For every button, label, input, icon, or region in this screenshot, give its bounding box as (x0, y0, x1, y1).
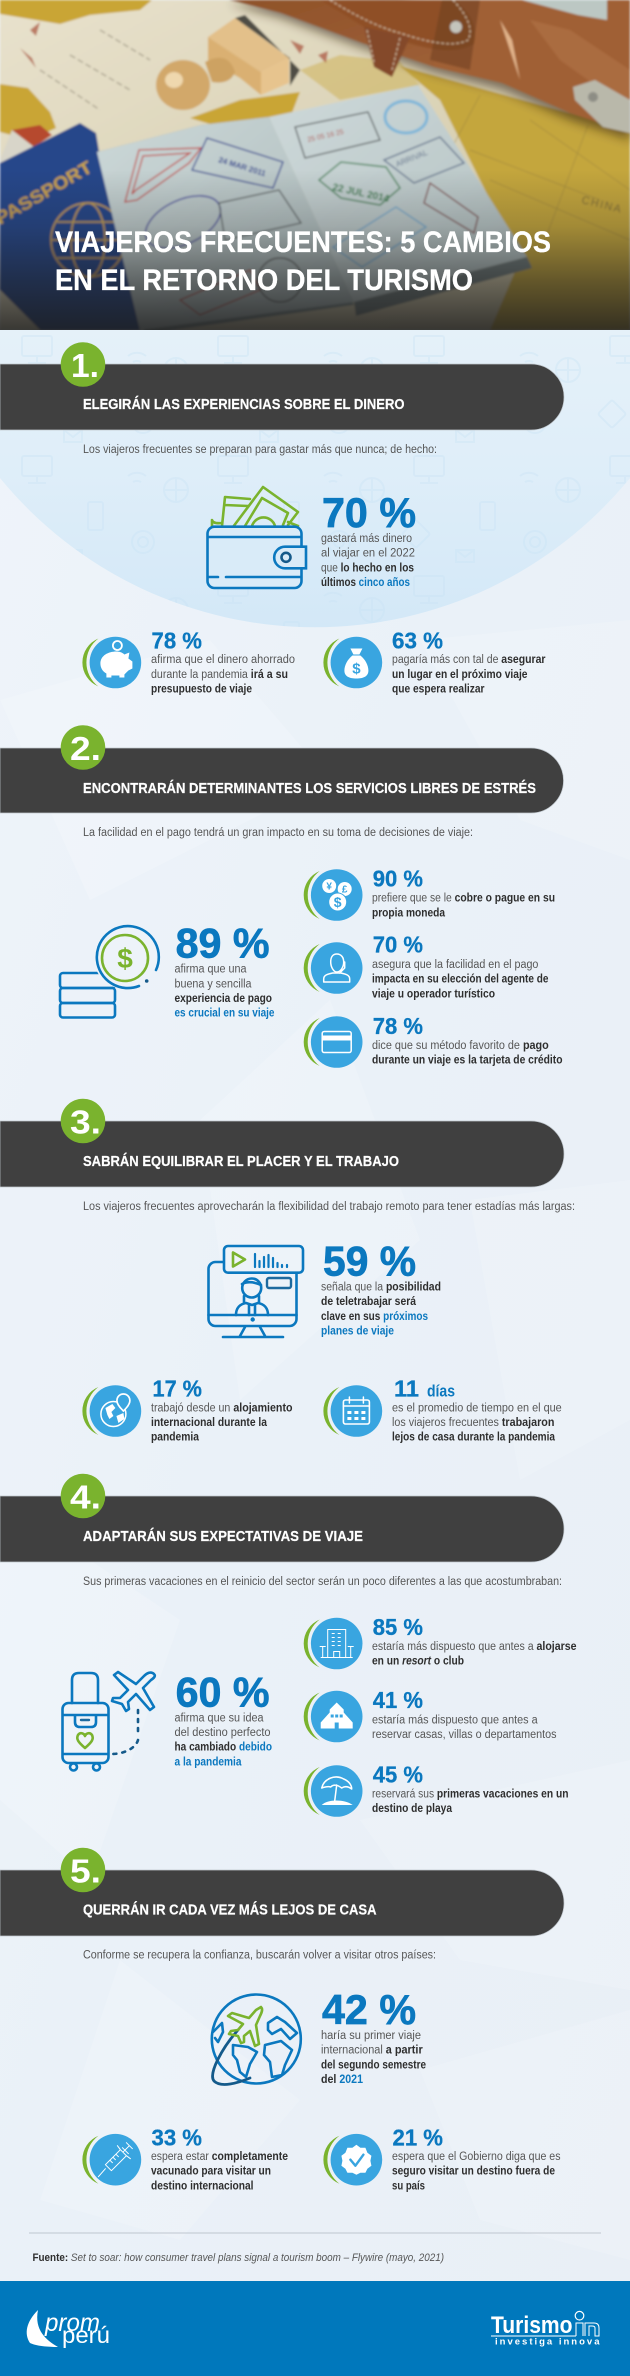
stat: 70 %: 70 % (322, 489, 416, 536)
section 2 intro: La facilidad en el pago tendrá un gran impacto en su toma de decisiones de viaje: (83, 827, 473, 839)
stat: 90 %: prefiere que se le cobre o pague en su (372, 893, 555, 905)
passport stamps: 22 JUL 2014 (331, 182, 390, 205)
stat: 85 % (372, 1614, 576, 1668)
section 5 heading: QUERRÁN IR CADA VEZ MÁS LEJOS DE CASA (83, 1902, 377, 1918)
stat: 59 %: de teletrabajar será (321, 1296, 417, 1308)
stat: 33 %: 33 % (152, 2124, 202, 2150)
logo: PromPerú: prom (44, 2309, 100, 2337)
stat: 85 %: estaría más dispuesto que antes a alojarse (372, 1641, 576, 1653)
icon: globe with pin (82, 1385, 141, 1437)
stat: 42 %: 42 % (322, 1986, 416, 2033)
stat: 42 %: haría su primer viaje (321, 2030, 421, 2042)
stat: 78 %: afirma que el dinero ahorrado (151, 654, 295, 666)
stat: 78 %: 78 % (152, 628, 202, 654)
icon: calendar (323, 1385, 382, 1437)
icon: coins with dollar (60, 926, 159, 1018)
stat: 21 %: espera que el Gobierno diga que es (392, 2151, 561, 2163)
stat: 11 días (392, 1376, 562, 1444)
stat: 70 % agent: viaje u operador turístico (372, 988, 495, 1000)
stat: 42 % (321, 1986, 426, 2086)
section 3 heading (0, 1099, 564, 1187)
stat: 63 %: un lugar en el próximo viaje (392, 669, 528, 681)
stat: 41 % (372, 1687, 557, 1741)
decorative blue arc panel with icons (0, 330, 630, 630)
passport stamps: 24 MAR 2011 (217, 155, 267, 178)
icon: currencies: $ (334, 894, 342, 910)
passport stamps: 25 05 16 25 (307, 129, 345, 144)
icon: money bag (323, 637, 382, 688)
stat: 85 %: en un resort o club (372, 1656, 464, 1668)
stat: 11 días: es el promedio de tiempo en el que (392, 1402, 562, 1414)
map: yellow land (0, 0, 630, 330)
stat: 60 %: 60 % (176, 1669, 270, 1716)
stat: 59 %: planes de viaje (321, 1326, 394, 1338)
stat: 63 %: que espera realizar (392, 684, 485, 696)
title: EN EL RETORNO DEL TURISMO (55, 264, 473, 297)
suitcase shadow (229, 0, 630, 140)
stat: 89 % (174, 920, 274, 1020)
icon: verified badge (323, 2134, 382, 2186)
stat: 89 %: es crucial en su viaje (174, 1008, 274, 1020)
section 5 heading: 5. (70, 1852, 101, 1890)
stat: 89 %: afirma que una (174, 964, 247, 976)
stat: 78 % card: dice que su método favorito de pago (372, 1040, 549, 1052)
icon: currencies (304, 869, 362, 921)
stat: 11 días: 11 (394, 1376, 419, 1402)
icon: credit card (304, 1016, 362, 1068)
icon: currencies: ¥ (326, 882, 332, 892)
stat: 33 %: destino internacional (151, 2180, 254, 2192)
stat: 63 %: pagaría más con tal de asegurar (392, 654, 546, 666)
section 2 heading: 2. (70, 730, 101, 767)
icon: wallet with bills (208, 487, 306, 588)
map: lines (40, 29, 594, 210)
dark bottom gradient (0, 170, 630, 330)
stat: 63 %: 63 % (392, 628, 443, 654)
footer band (0, 2281, 630, 2376)
open passport (146, 302, 354, 330)
stat: 70 % agent (372, 932, 548, 1000)
title: VIAJEROS FRECUENTES: 5 CAMBIOS (55, 226, 551, 259)
icon: beach umbrella (304, 1765, 362, 1817)
stat: 42 %: internacional a partir (321, 2045, 423, 2057)
source note: Fuente: Set to soar: how consumer travel plans signal a tourism boom – Flywire (mayo, 2021) (32, 2252, 444, 2264)
stat: 89 %: 89 % (176, 920, 270, 966)
stat: 60 %: a la pandemia (174, 1756, 242, 1768)
stat: 33 %: espera estar completamente (151, 2151, 288, 2163)
stat: 59 %: 59 % (323, 1238, 416, 1285)
stat: 17 %: trabajó desde un alojamiento (151, 1402, 292, 1414)
stat: 60 %: afirma que su idea (174, 1712, 264, 1724)
stat: 33 % (151, 2124, 288, 2192)
logo: PromPerú: perú (62, 2322, 110, 2348)
source divider (29, 2232, 601, 2234)
icon: piggy bank (82, 637, 141, 688)
stat: 41 %: reservar casas, villas o departamentos (372, 1729, 557, 1741)
stat: 45 %: 45 % (373, 1761, 423, 1787)
stat: 45 %: destino de playa (372, 1803, 453, 1815)
stat: 59 %: clave en sus próximos (321, 1311, 428, 1323)
stat: 78 % card: 78 % (373, 1013, 423, 1039)
icon: globe with plane (212, 1994, 301, 2084)
stat: 70 % agent: asegura que la facilidad en el pago (372, 959, 538, 971)
stat: 70 % agent: 70 % (373, 932, 423, 958)
stat: 78 % card (372, 1013, 562, 1067)
stat: 70 %: al viajar en el 2022 (321, 548, 415, 560)
icon: currencies: £ (342, 884, 348, 896)
icon: agent with headset (304, 942, 362, 994)
stat: 89 %: experiencia de pago (174, 993, 272, 1005)
stat: 60 %: ha cambiado debido (174, 1742, 272, 1754)
hero photo: passport, stamp, suitcase and map (0, 0, 630, 334)
section 3 intro: Los viajeros frecuentes aprovecharán la flexibilidad del trabajo remoto para tener estadías más largas: (83, 1201, 575, 1213)
stat: 33 %: vacunado para visitar un (151, 2166, 271, 2178)
stat: 70 %: gastará más dinero (321, 533, 412, 545)
stat: 42 %: del 2021 (321, 2074, 364, 2086)
icon: coins with dollar: $ (117, 943, 133, 974)
section 1 heading (0, 342, 564, 430)
icon: money bag: $ (352, 660, 361, 678)
blue passport (0, 123, 141, 330)
icon: hotel resort (304, 1618, 362, 1669)
stat: 21 %: 21 % (392, 2124, 443, 2150)
stat: 78 % card: durante un viaje es la tarjeta de crédito (372, 1055, 562, 1067)
section 1 intro: Los viajeros frecuentes se preparan para gastar más que nunca; de hecho: (83, 444, 437, 456)
stat: 21 %: su país (392, 2180, 425, 2192)
stat: 70 % (321, 489, 416, 589)
map: red accents (20, 22, 328, 68)
stat: 45 % (372, 1761, 568, 1815)
logo: Turismo In: Turismo (491, 2312, 572, 2339)
map label: CHINA (580, 194, 624, 216)
logo: Turismo In: investiga innova (495, 2336, 600, 2347)
stat: 41 %: 41 % (373, 1687, 423, 1713)
stat: 89 %: buena y sencilla (174, 978, 252, 990)
section 3 heading: 3. (70, 1104, 101, 1140)
stat: 70 % agent: impacta en su elección del agente de (372, 974, 548, 986)
stat: 63 % (392, 628, 546, 696)
section 4 heading (0, 1474, 564, 1562)
faint polygon background texture (0, 620, 630, 2260)
passport stamps: ARRIVAL (394, 148, 429, 169)
stat: 78 % (151, 628, 295, 696)
stat: 17 %: pandemia (151, 1432, 200, 1444)
stat: 78 %: durante la pandemia irá a su (151, 669, 288, 681)
suitcase strap (336, 0, 474, 48)
stat: 70 %: últimos cinco años (321, 577, 410, 589)
section 3 heading: SABRÁN EQUILIBRAR EL PLACER Y EL TRABAJO (83, 1153, 399, 1170)
stat: 90 % (372, 866, 555, 919)
stat: 21 %: seguro visitar un destino fuera de (392, 2166, 555, 2178)
stat: 21 % (392, 2124, 561, 2192)
section 4 heading: 4. (70, 1478, 101, 1516)
stat: 59 % (321, 1238, 441, 1338)
stat: 60 %: del destino perfecto (174, 1727, 270, 1739)
stat: 17 % (151, 1376, 292, 1444)
section 5 intro: Conforme se recupera la confianza, buscarán volver a visitar otros países: (83, 1950, 436, 1962)
stat: 78 %: presupuesto de viaje (151, 684, 252, 696)
stat: 41 %: estaría más dispuesto que antes a (372, 1714, 538, 1726)
logo: Turismo In (491, 2311, 600, 2347)
icon: syringe (82, 2134, 141, 2186)
tag (2, 129, 31, 161)
stat: 45 %: reservará sus primeras vacaciones en un (372, 1788, 568, 1800)
stat: 11 días: lejos de casa durante la pandemia (392, 1432, 556, 1444)
stat: 59 %: señala que la posibilidad (321, 1281, 441, 1293)
stat: 11 días: los viajeros frecuentes trabajaron (392, 1417, 554, 1429)
section 1 heading: ELEGIRÁN LAS EXPERIENCIAS SOBRE EL DINERO (83, 396, 404, 413)
stat: 11 días: días (427, 1382, 455, 1401)
section 5 heading (0, 1848, 564, 1936)
logo: PromPerú (27, 2309, 110, 2348)
stat: 90 %: propia moneda (372, 907, 446, 919)
icon: house (304, 1691, 362, 1742)
passport stamps (125, 101, 478, 315)
suitcase leather (230, 0, 435, 68)
stat: 70 %: que lo hecho en los (321, 562, 414, 574)
section 4 intro: Sus primeras vacaciones en el reinicio del sector serán un poco diferentes a las que acostumbraban: (83, 1576, 562, 1588)
stat: 85 %: 85 % (373, 1614, 423, 1640)
wooden stamp (235, 15, 300, 86)
icon: suitcase and plane (62, 1672, 155, 1770)
section 2 heading: ENCONTRARÁN DETERMINANTES LOS SERVICIOS LIBRES DE ESTRÉS (83, 780, 536, 797)
icon: remote work monitor (208, 1246, 303, 1337)
map base (0, 0, 567, 330)
section 2 heading (0, 725, 564, 813)
title (55, 226, 551, 297)
stat: 42 %: del segundo semestre (321, 2059, 426, 2071)
stat: 17 %: internacional durante la (151, 1417, 268, 1429)
stat: 90 %: 90 % (373, 866, 423, 892)
section 4 heading: ADAPTARÁN SUS EXPECTATIVAS DE VIAJE (83, 1528, 363, 1545)
section 1 heading: 1. (71, 347, 99, 384)
stat: 17 %: 17 % (152, 1376, 202, 1402)
metal plates (522, 0, 607, 20)
stat: 60 % (174, 1669, 272, 1768)
